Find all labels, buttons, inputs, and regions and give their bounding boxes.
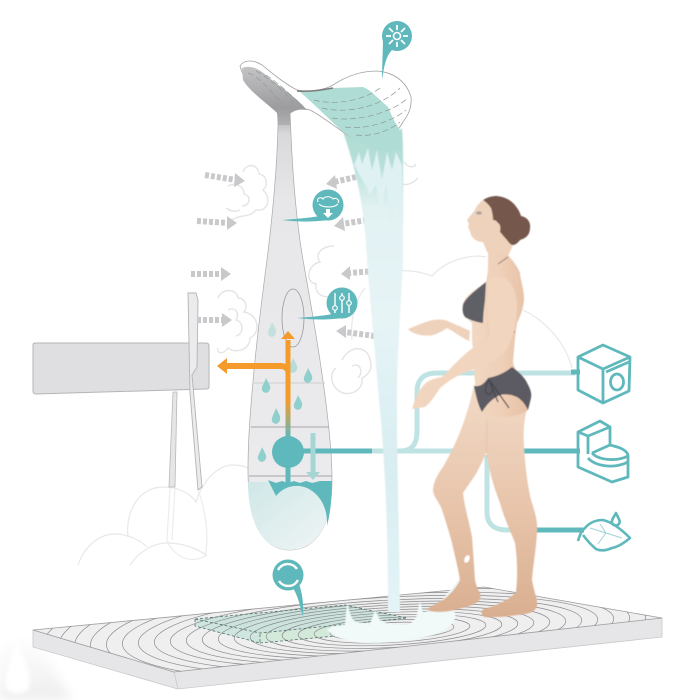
icon: leaf with drop bbox=[578, 513, 630, 550]
face and neck bbox=[467, 200, 513, 256]
upper-arm shading bbox=[488, 290, 494, 352]
wall panel bbox=[33, 343, 209, 394]
control valve bbox=[272, 436, 304, 468]
pin icon: sliders bbox=[297, 288, 358, 320]
pin icon: sun bbox=[382, 21, 412, 80]
bikini top bbox=[463, 282, 486, 323]
bikini strap bbox=[498, 257, 515, 332]
teal water film bbox=[300, 87, 402, 152]
shower head bbox=[240, 61, 411, 152]
shower column bbox=[248, 112, 332, 550]
leg crease shading bbox=[485, 420, 488, 458]
torso bbox=[463, 240, 530, 417]
bikini bottom bbox=[474, 367, 531, 412]
front bent leg bbox=[427, 385, 495, 612]
background clouds behind figure bbox=[78, 256, 572, 565]
woman figure bbox=[408, 196, 537, 617]
eye bbox=[476, 211, 482, 215]
green filter area bbox=[195, 605, 407, 643]
hand shower and hose bbox=[167, 293, 207, 559]
water tray bbox=[32, 586, 662, 690]
down arrow to tank bbox=[306, 472, 320, 480]
basin water bbox=[248, 480, 332, 550]
concentric ripple lines bbox=[47, 588, 646, 672]
head front lip bbox=[297, 88, 333, 91]
head dashed contours bbox=[248, 71, 408, 135]
grey underside bbox=[242, 67, 307, 125]
column dividers and oval bbox=[249, 289, 332, 476]
icon: toilet bbox=[578, 421, 628, 482]
bikini ties bbox=[485, 380, 509, 408]
front arm bbox=[412, 277, 517, 409]
pin icon: condensation bbox=[282, 190, 344, 222]
splash on tray bbox=[327, 576, 461, 643]
head outer outline bbox=[240, 61, 411, 143]
tray top surface bbox=[33, 587, 662, 672]
water drops in column bbox=[258, 322, 312, 462]
rear forearm and hand bbox=[408, 319, 470, 341]
icon: washing machine bbox=[578, 345, 630, 403]
pipes from the column to household uses bbox=[288, 372, 584, 530]
steam clouds around column bbox=[218, 162, 418, 394]
grey airflow arrows bbox=[191, 175, 375, 336]
orange arrows: heat flow bbox=[217, 331, 295, 438]
ankle splash bbox=[463, 554, 471, 564]
tray front faces bbox=[33, 618, 662, 689]
background corner smudges bbox=[0, 636, 72, 700]
rear standing leg bbox=[480, 398, 537, 617]
grey arrow heads bbox=[221, 173, 350, 338]
filter dashed outline bbox=[195, 605, 407, 643]
falling water stream bbox=[343, 128, 403, 612]
hair bbox=[483, 196, 530, 245]
pin icon: recycle bbox=[272, 560, 304, 617]
